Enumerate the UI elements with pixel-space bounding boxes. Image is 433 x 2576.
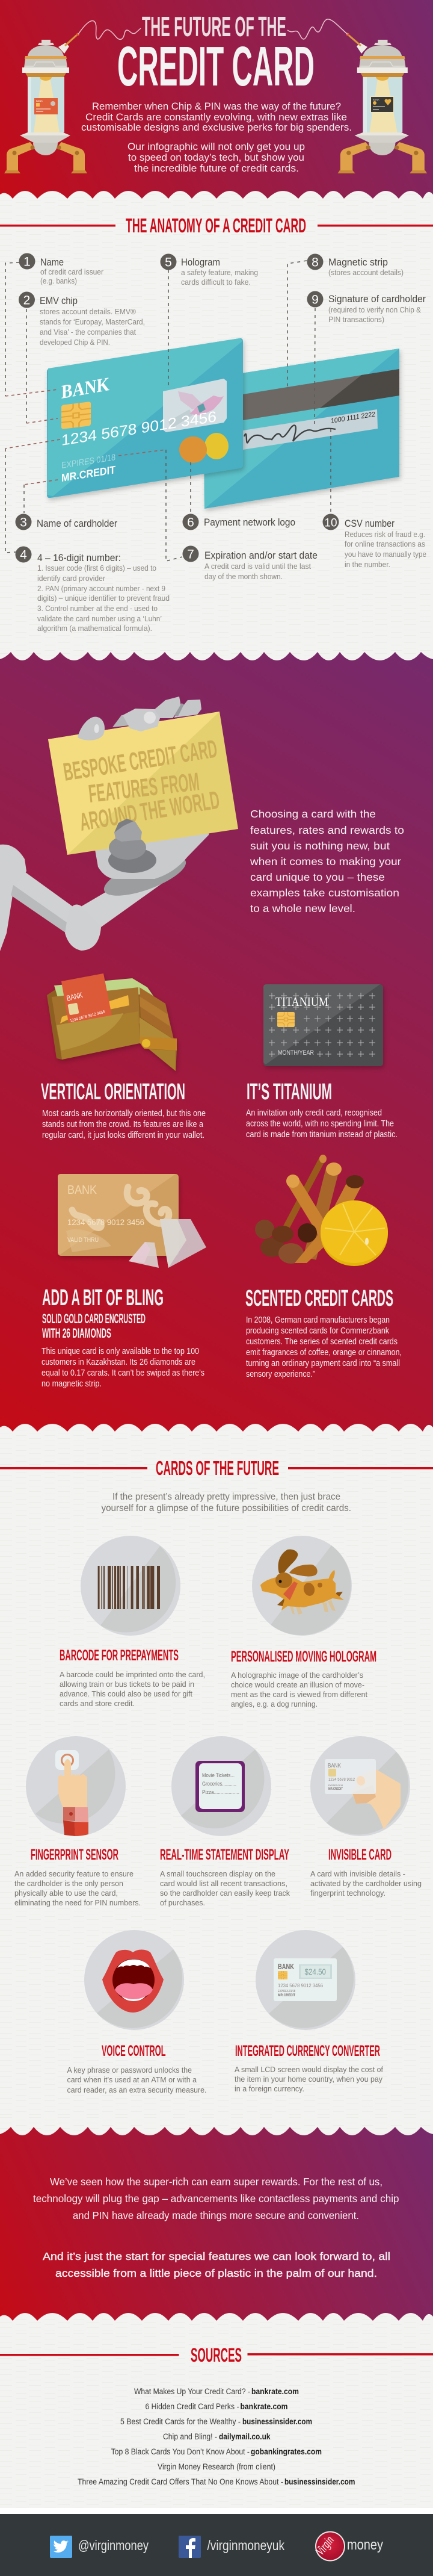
illustration: wallet with vertical card: 1234 5678 9012 3456 [70, 1010, 106, 1023]
twitter handle: @virginmoney [78, 2537, 149, 2553]
illustration: back of credit card [203, 349, 399, 509]
feature: vertical orientation [41, 1079, 206, 1140]
sources list: Virgin Money Research (from client) [158, 2462, 275, 2471]
feature: scented credit cards: sensory experience.” [246, 1369, 315, 1379]
illustration: front of credit card [47, 338, 243, 498]
intro text: Credit Cards are constantly evolving, with new extras like [85, 112, 347, 123]
callout leader lines [5, 261, 331, 561]
illustration: gold card with diamonds: 1234 5678 9012 3456 [67, 1217, 144, 1227]
heading: sources: SOURCES [191, 2344, 242, 2366]
callout 1: name: 1 [23, 255, 31, 268]
feature: add a bit of bling: no magnetic strip. [41, 1379, 102, 1389]
feature: invisible card [310, 1736, 422, 1898]
callout 7: expiration: day of the month shown. [204, 573, 283, 581]
callout 4: 16-digit number: 4 [20, 548, 27, 562]
feature: barcode for prepayments: cards and store credit. [60, 1699, 135, 1708]
feature: personalised moving hologram: ment as the card is viewed from different [231, 1690, 367, 1699]
intro text: the incredible future of credit cards. [134, 163, 299, 174]
feature: barcode for prepayments [60, 1536, 205, 1708]
intro paragraph [250, 808, 404, 914]
illustration: cinnamon, coffee and orange [255, 1155, 388, 1266]
logo: virgin money: money [347, 2537, 383, 2553]
callout 10: CSV number: you have to manually type [345, 550, 426, 559]
illustration: front of credit card: EXPIRES 01/18 [61, 453, 115, 471]
callout 8: magnetic strip: Magnetic strip [328, 257, 388, 268]
intro text: to speed on today’s tech, but show you [128, 152, 304, 163]
sources list: Three Amazing Credit Card Offers That No One Knows About - [78, 2477, 283, 2486]
feature: personalised moving hologram [231, 1536, 376, 1709]
icon: touchscreen statement: Groceries........... [202, 1781, 236, 1787]
callout 10: CSV number: Reduces risk of fraud e.g. [345, 530, 425, 539]
feature: scented credit cards [245, 1286, 402, 1379]
feature: real-time statement display: A small touchscreen display on the [160, 1869, 275, 1878]
feature: add a bit of bling: customers in Kazakhstan. Its 26 diamonds are [41, 1357, 195, 1367]
feature: voice control: VOICE CONTROL [102, 2043, 166, 2059]
illustration: gold card with diamonds [58, 1174, 206, 1268]
callout 9: signature: 9 [312, 293, 319, 307]
sources list: bankrate.com [251, 2387, 299, 2396]
icon: open mouth [102, 1949, 164, 2013]
sources list: What Makes Up Your Credit Card? - [134, 2387, 250, 2396]
intro text [81, 101, 352, 174]
callout 7: expiration [183, 545, 318, 581]
illustration: front of credit card: 1234 5678 9012 3456 [61, 408, 216, 449]
intro paragraph: to a whole new level. [250, 902, 355, 914]
icon: card with LCD screen: BANK [278, 1962, 294, 1971]
feature: it's titanium: IT’S TITANIUM [247, 1079, 332, 1105]
feature: voice control: card reader, as an extra security measure. [67, 2085, 207, 2094]
icon: twitter [50, 2536, 72, 2558]
icon: card with LCD screen: EXPIRES 01/18 [278, 1990, 295, 1993]
illustration: gold card with diamonds: BANK [67, 1184, 97, 1197]
feature: vertical orientation: regular card, it just looks different in your wallet. [42, 1130, 204, 1140]
callout 2: EMV chip: 2 [23, 294, 30, 307]
callout 10: CSV number: for online transactions as [345, 540, 425, 548]
bespoke yellow card [48, 712, 238, 855]
heading: cards of the future: CARDS OF THE FUTURE [156, 1457, 279, 1479]
feature: barcode for prepayments: advance. This could also be used for gift [60, 1689, 192, 1698]
conclusion text [33, 2176, 399, 2279]
intro paragraph: suit you is nothing new, but [250, 840, 390, 852]
conclusion text: technology will plug the gap – advancements like contactless payments and chip [33, 2193, 399, 2205]
feature: barcode for prepayments: BARCODE FOR PREPAYMENTS [60, 1647, 179, 1664]
feature: invisible card: activated by the cardholder using [310, 1879, 422, 1888]
feature: barcode for prepayments: A barcode could be imprinted onto the card, [60, 1670, 205, 1679]
feature: real-time statement display [160, 1736, 290, 1907]
icon: finger pressing sensor [55, 1750, 88, 1836]
callout 7: expiration: 7 [187, 548, 194, 561]
callout 9: signature: PIN transactions) [328, 315, 384, 324]
intro text: customisable designs and exclusive perks for big spenders. [81, 122, 352, 133]
feature: scented credit cards: customers. The series of scented credit cards [246, 1336, 398, 1347]
intro text: cards of the future [101, 1492, 351, 1513]
icon: hand holding transparent card: BANK [328, 1763, 341, 1769]
illustration: titanium card: MONTH/YEAR [278, 1049, 314, 1057]
feature: it's titanium: card is made from titanium instead of plastic. [246, 1129, 398, 1140]
illustration: titanium card: TITANIUM [275, 995, 328, 1009]
illustration: titanium card [263, 984, 383, 1066]
illustration: left card machine: BANK [36, 99, 43, 102]
callout 9: signature [307, 291, 426, 324]
callout 7: expiration: Expiration and/or start date [204, 550, 318, 561]
icon: running dog [260, 1550, 344, 1615]
feature: fingerprint sensor: eliminating the need for PIN numbers. [14, 1898, 141, 1907]
feature: voice control: A key phrase or password unlocks the [67, 2065, 192, 2075]
sources list: Chip and Bling! - [163, 2432, 217, 2441]
callout 5: hologram [160, 254, 258, 287]
callout 4: 16-digit number: 3. Control number at the end - used to [37, 604, 158, 613]
sources list [78, 2387, 355, 2486]
callout 2: EMV chip: and Visa’ - the companies that [40, 328, 136, 337]
callout 4: 16-digit number: validate the card number using a ‘Luhn’ [37, 615, 162, 623]
callout 4: 16-digit number: identify card provider [37, 574, 105, 583]
callout 6: payment network logo: 6 [187, 515, 194, 530]
callout 6: payment network logo: Payment network logo [204, 517, 295, 528]
conclusion text: accessible from a little piece of plastic in the palm of our hand. [55, 2267, 377, 2279]
feature: add a bit of bling: SOLID GOLD CARD ENCRUSTED [42, 1311, 146, 1326]
icon: touchscreen statement [195, 1761, 245, 1812]
callout 8: magnetic strip [307, 254, 404, 277]
sources list: Top 8 Black Cards You Don’t Know About - [111, 2447, 250, 2456]
title [117, 11, 315, 98]
callout 4: 16-digit number: 4 – 16-digit number: [37, 553, 121, 563]
panel: header [0, 0, 433, 211]
feature: personalised moving hologram: angles, e.g. a dog running. [231, 1699, 318, 1709]
panel: bespoke credit card features [0, 640, 433, 1444]
intro text: Remember when Chip & PIN was the way of the future? [92, 101, 341, 112]
icon: facebook [179, 2536, 201, 2558]
callout 5: hologram: cards difficult to fake. [181, 278, 251, 287]
intro text: cards of the future: yourself for a glimpse of the future possibilities of credit cards. [101, 1503, 351, 1513]
sources list: 5 Best Credit Cards for the Wealthy - [120, 2417, 241, 2426]
conclusion text: We’ve seen how the super-rich can earn super rewards. For the rest of us, [50, 2176, 382, 2188]
callout 1: name: Name [40, 257, 64, 268]
callout 5: hologram: Hologram [181, 257, 220, 268]
intro paragraph: card unique to you – these [250, 871, 385, 883]
illustration: gold card with diamonds: VALID THRU [67, 1237, 99, 1244]
icon: card with LCD screen [274, 1958, 337, 2001]
callout 5: hologram: 5 [165, 255, 172, 270]
logo: virgin money: Virgin [312, 2533, 337, 2558]
icon: hand holding transparent card [325, 1759, 401, 1830]
illustration: wallet with vertical card: BANK [66, 990, 84, 1003]
feature: fingerprint sensor [14, 1736, 141, 1907]
sources list: businessinsider.com [242, 2417, 312, 2426]
feature: integrated currency converter: in a foreign currency. [235, 2084, 304, 2093]
sources list: businessinsider.com [284, 2477, 355, 2486]
feature: scented credit cards: emit fragrances of coffee, orange or cinnamon, [246, 1347, 402, 1358]
callout 9: signature: Signature of cardholder [328, 294, 426, 305]
heading: sources [0, 2344, 433, 2366]
illustration: left card machine [4, 20, 141, 173]
intro paragraph: Choosing a card with the [250, 808, 376, 820]
sources list: dailymail.co.uk [219, 2432, 271, 2441]
feature: add a bit of bling: This unique card is only available to the top 100 [41, 1346, 199, 1356]
icon: card with LCD screen: 1234 5678 9012 3456 [278, 1983, 324, 1988]
icon: barcode [98, 1566, 160, 1609]
callout 10: CSV number: CSV number [345, 518, 395, 529]
feature: real-time statement display: card would list all recent transactions, [160, 1879, 287, 1888]
feature: it's titanium [246, 1079, 398, 1140]
bespoke yellow card: AROUND THE WORLD [78, 786, 221, 836]
callout 9: signature: (required to verify non Chip & [328, 306, 422, 314]
callout 4: 16-digit number [16, 547, 170, 633]
sources list: 6 Hidden Credit Card Perks - [146, 2402, 239, 2411]
callout 4: 16-digit number: 1. Issuer code (first 6 digits) – used to [37, 564, 156, 573]
conclusion text: And it’s just the start for special features we can look forward to, all [43, 2250, 390, 2262]
feature: real-time statement display: of purchases. [160, 1898, 205, 1907]
callout 2: EMV chip: stores account details. EMV® [40, 308, 137, 316]
feature: scented credit cards: In 2008, German card manufacturers began [246, 1315, 390, 1325]
feature: scented credit cards: producing scented cards for Commerzbank [246, 1326, 389, 1336]
illustration: wallet with vertical card: MR.CREDIT [72, 1030, 90, 1040]
callout 6: payment network logo [183, 514, 295, 530]
callout 2: EMV chip: stands for ‘Europay, MasterCard, [40, 318, 145, 326]
callout 1: name: (e.g. banks) [40, 277, 77, 285]
icon: hand holding transparent card: MR.CREDIT [328, 1787, 343, 1791]
feature: real-time statement display: so the cardholder can easily keep track [160, 1889, 290, 1898]
feature: voice control [67, 1930, 207, 2094]
illustration: right card machine: BANK [373, 98, 379, 101]
callout 3: name of cardholder: Name of cardholder [37, 518, 117, 529]
feature: personalised moving hologram: choice would create an illusion of move- [231, 1680, 364, 1689]
feature: fingerprint sensor: FINGERPRINT SENSOR [31, 1846, 118, 1863]
intro paragraph: when it comes to making your [250, 855, 401, 867]
feature: integrated currency converter [235, 1930, 383, 2093]
sources list: gobankingrates.com [251, 2447, 322, 2456]
feature: vertical orientation: Most cards are horizontally oriented, but this one [42, 1108, 206, 1119]
intro text: Our infographic will not only get you up [127, 141, 305, 152]
intro text: cards of the future: If the present’s already pretty impressive, then just brace [112, 1492, 340, 1502]
bespoke yellow card: BESPOKE CREDIT CARD [61, 734, 219, 786]
feature: invisible card: A card with invisible details - [310, 1869, 405, 1878]
icon: card with LCD screen: $24.50 [304, 1967, 326, 1976]
feature: fingerprint sensor: An added security feature to ensure [14, 1869, 134, 1878]
callout 1: name: of credit card issuer [40, 268, 103, 276]
feature: real-time statement display: REAL-TIME STATEMENT DISPLAY [160, 1846, 289, 1863]
feature: add a bit of bling [41, 1285, 204, 1389]
feature: invisible card: fingerprint technology. [310, 1889, 385, 1898]
icon: card with LCD screen: MR.CREDIT [278, 1994, 295, 1997]
facebook handle: /virginmoneyuk [207, 2537, 284, 2553]
sources list: bankrate.com [241, 2402, 287, 2411]
feature: vertical orientation: VERTICAL ORIENTATION [41, 1079, 185, 1105]
feature: fingerprint sensor: the cardholder is the only person [14, 1879, 123, 1888]
feature: add a bit of bling: equal to 0.17 carats. It can’t be swiped as there’s [41, 1368, 204, 1378]
callout 2: EMV chip: developed Chip & PIN. [40, 338, 110, 347]
illustration: robot arm holding card [0, 697, 238, 951]
illustration: front of credit card: BANK [61, 373, 109, 403]
title: THE FUTURE OF THE [142, 11, 286, 42]
panel: footer [0, 2508, 433, 2576]
feature: it's titanium: across the world, with no spending limit. The [246, 1119, 394, 1129]
callout 10: CSV number [322, 514, 426, 569]
feature: vertical orientation: stands out from the crowd. Its features are like a [42, 1119, 204, 1129]
feature: barcode for prepayments: allowing train or bus tickets to be paid in [60, 1680, 194, 1689]
conclusion text: and PIN have already made things more secure and convenient. [73, 2209, 359, 2221]
illustration: front of credit card: MR.CREDIT [61, 464, 115, 484]
callout 5: hologram: a safety feature, making [181, 268, 258, 277]
callout 3: name of cardholder: 3 [20, 515, 27, 530]
feature: personalised moving hologram: A holographic image of the cardholder’s [231, 1671, 363, 1680]
callout 8: magnetic strip: 8 [312, 255, 319, 270]
feature: voice control: card when it’s used at an ATM or with a [67, 2075, 197, 2084]
feature: scented credit cards: turning an ordinary payment card into “a small [246, 1358, 400, 1368]
heading: cards of the future [0, 1457, 433, 1479]
illustration: back of credit card: 1000 1111 2222 [331, 411, 375, 425]
illustration: wallet with vertical card [47, 973, 177, 1071]
feature: add a bit of bling: ADD A BIT OF BLING [42, 1285, 164, 1311]
intro paragraph: features, rates and rewards to [250, 824, 404, 836]
feature: it's titanium: An invitation only credit card, recognised [246, 1108, 382, 1118]
callout 3: name of cardholder [16, 514, 117, 530]
icon: touchscreen statement: Pizza................... [202, 1789, 239, 1796]
feature: integrated currency converter: A small LCD screen would display the cost of [235, 2065, 383, 2074]
callout 2: EMV chip: EMV chip [40, 296, 78, 306]
feature: fingerprint sensor: physically able to use the card, [14, 1889, 118, 1898]
bespoke yellow card: FEATURES FROM [87, 767, 201, 808]
feature: add a bit of bling: WITH 26 DIAMONDS [42, 1326, 111, 1341]
icon: touchscreen statement: Movie Tickets... [202, 1772, 235, 1779]
illustration: wallet with vertical card: EXPIRES 01/18 [72, 1026, 89, 1034]
callout 1: name [19, 253, 103, 285]
callout 4: 16-digit number: 2. PAN (primary account number - next 9 [37, 585, 165, 593]
callout 10: CSV number: in the number. [345, 560, 390, 569]
intro paragraph: examples take customisation [250, 887, 399, 899]
callout 7: expiration: A credit card is valid until the last [204, 562, 312, 571]
callout 4: 16-digit number: digits) – unique identifier to prevent fraud [37, 594, 170, 603]
callout 10: CSV number: 10 [324, 517, 337, 530]
illustration: right card machine [287, 19, 427, 173]
panel: conclusion [0, 2115, 433, 2333]
logo: virgin money [312, 2531, 383, 2561]
callout 2: EMV chip [19, 291, 145, 347]
callout 8: magnetic strip: (stores account details) [328, 268, 404, 277]
callout 4: 16-digit number: algorithm (a mathematical formula). [37, 624, 152, 633]
icon: hand holding transparent card: 1234 5678 9012 [328, 1778, 355, 1782]
icon: hand holding transparent card: EXPIRES 01/18 [328, 1784, 343, 1787]
feature: integrated currency converter: the item in your home country, when you pay [235, 2075, 382, 2084]
